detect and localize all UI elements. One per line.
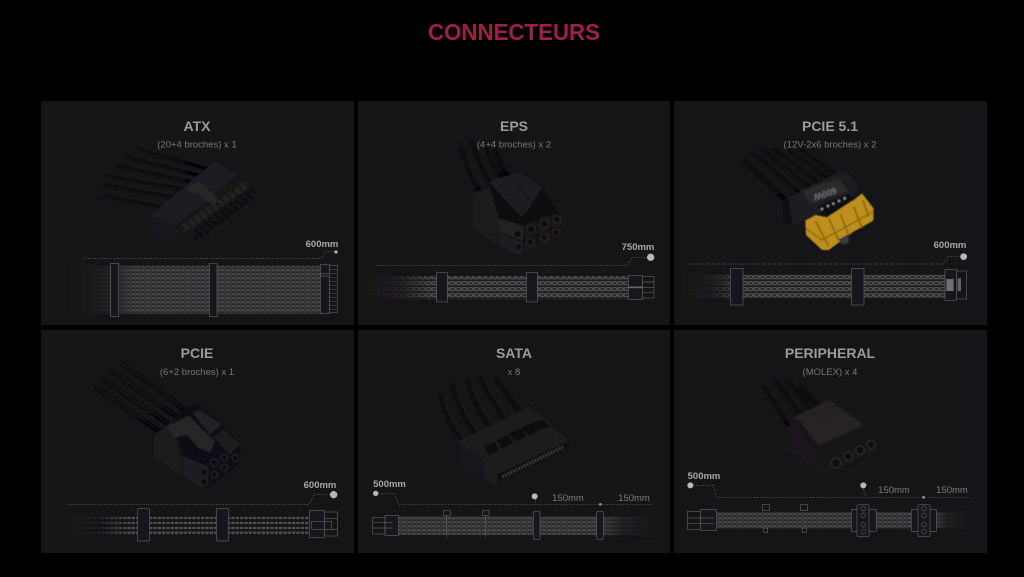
heading: EPS: EPS — [500, 118, 528, 134]
segment label: 150mm: 150mm — [936, 485, 968, 496]
length label: 750mm: 750mm — [622, 242, 654, 253]
heading: PCIE: PCIE — [181, 345, 213, 361]
panel: ATX — [41, 101, 354, 325]
subtitle: ATX: (20+4 broches) x 1 — [157, 140, 237, 150]
heading: PCIE 5.1: PCIE 5.1 — [802, 118, 858, 134]
subtitle: PCIE 5.1: (12V-2x6 broches) x 2 — [784, 140, 876, 150]
panel: PCIE — [41, 330, 354, 553]
segment label: 150mm: 150mm — [618, 493, 650, 504]
heading: PERIPHERAL: PERIPHERAL — [785, 345, 876, 361]
connector: PCIE 5.1 — [744, 149, 874, 250]
connector: PERIPHERAL — [760, 381, 878, 475]
length label: 600mm: 600mm — [934, 240, 966, 251]
length label: 600mm: 600mm — [306, 239, 338, 250]
connector: EPS — [457, 142, 563, 254]
segment label: 150mm: 150mm — [552, 493, 584, 504]
cable diagram: ATX — [70, 250, 338, 317]
length label: 500mm: 500mm — [373, 479, 406, 490]
panel: EPS — [358, 101, 670, 325]
cable diagram: PERIPHERAL — [687, 482, 970, 537]
subtitle: PERIPHERAL: (MOLEX) x 4 — [803, 367, 857, 378]
subtitle: EPS: (4+4 broches) x 2 — [477, 140, 551, 150]
title: CONNECTEURS — [428, 19, 600, 45]
panel: PERIPHERAL — [674, 330, 987, 553]
length label: 600mm: 600mm — [304, 480, 336, 491]
subtitle: SATA: x 8 — [508, 367, 520, 378]
cable diagram: EPS — [359, 254, 654, 303]
cable diagram: PCIE 5.1 — [682, 253, 967, 305]
length label: 500mm: 500mm — [688, 471, 720, 482]
connector: SATA — [441, 376, 568, 486]
panel: PCIE 5.1 — [674, 101, 987, 325]
heading: SATA: SATA — [496, 345, 532, 361]
subtitle: PCIE: (6+2 broches) x 1 — [160, 367, 234, 378]
connector: ATX — [95, 147, 254, 249]
connector: PCIE — [95, 361, 240, 488]
panel: SATA — [358, 330, 670, 553]
cable diagram: PCIE — [63, 491, 338, 541]
heading: ATX: ATX — [184, 118, 211, 134]
segment label: 150mm: 150mm — [878, 485, 910, 496]
cable diagram: SATA — [373, 491, 661, 540]
connector marking: 600W — [812, 185, 838, 202]
